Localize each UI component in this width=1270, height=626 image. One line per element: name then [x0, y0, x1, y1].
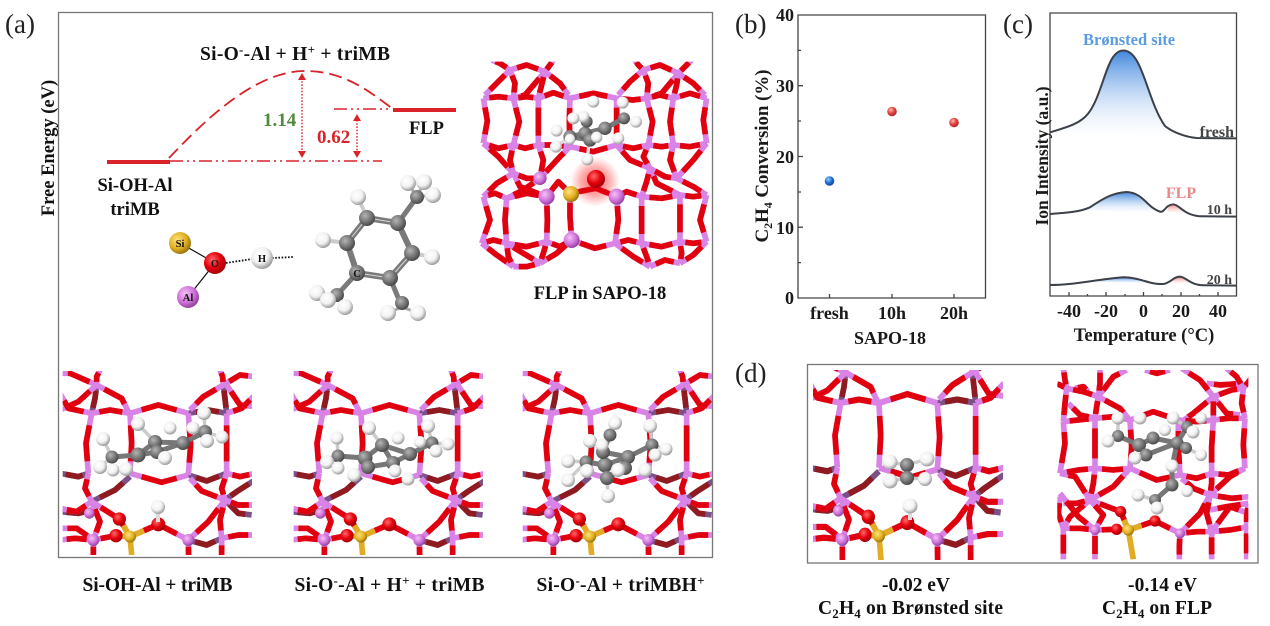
transition state label: + — [308, 42, 315, 57]
x axis title: SAPO-18 — [854, 328, 926, 348]
schematic: Si-O-H-Al site: O — [211, 259, 219, 270]
caption: Si-O--Al + triMBH+: - — [575, 573, 580, 588]
caption: C2H4 on Brønsted site: 2 — [832, 606, 839, 621]
curve 10h — [1050, 192, 1237, 217]
structure: Si-O--Al + H+ + triMB — [294, 371, 483, 555]
FLP structure caption: FLP in SAPO-18 — [534, 284, 666, 304]
panel label (b): (b) — [735, 9, 766, 39]
transition state label: - — [239, 42, 243, 57]
data point 20h — [949, 118, 959, 127]
panel d frame — [808, 364, 1258, 563]
y axis title: C — [752, 229, 773, 242]
area: FLP 20h — [1169, 277, 1192, 284]
initial state label: Si-OH-Al — [97, 176, 173, 196]
FLP level label: FLP — [409, 119, 444, 139]
caption: C2H4 on Brønsted site: H — [839, 598, 854, 619]
x axis numbers: 0 — [1139, 301, 1148, 321]
x axis numbers: -20 — [1094, 301, 1118, 321]
caption: C2H4 on Brønsted site: 4 — [854, 606, 861, 621]
caption: Si-O--Al + H+ + triMB: -Al + H — [338, 575, 402, 596]
y axis title: 2 — [761, 223, 775, 229]
y axis numbers: 40 — [776, 5, 794, 25]
caption: -0.14 eV: -0.14 eV — [1128, 575, 1197, 596]
label Brønsted site: Brønsted site — [1083, 30, 1175, 49]
schematic: Si-O-H-Al site: Si — [176, 239, 184, 250]
caption: Si-O--Al + triMBH+: Si-O — [536, 575, 575, 596]
panel d: C2H4 adsorption structures — [808, 356, 1258, 575]
caption: -0.02 eV: -0.02 eV — [882, 575, 950, 596]
schematic: trimethylbenzene molecule: C — [353, 269, 361, 280]
label 10 h: 10 h — [1207, 203, 1232, 218]
y axis numbers: 0 — [785, 288, 794, 308]
label fresh: fresh — [1200, 124, 1234, 141]
structure: Si-O--Al + triMBH+ — [522, 371, 712, 555]
initial state label: triMB — [110, 200, 160, 220]
caption: C2H4 on Brønsted site: C — [818, 598, 832, 619]
x axis categories: 20h — [940, 303, 968, 323]
x axis numbers: 20 — [1172, 301, 1190, 321]
barrier value 0.62: 0.62 — [317, 127, 350, 148]
plot frame and ticks — [1050, 13, 1236, 296]
panel c: ion intensity curves — [1032, 13, 1237, 346]
schematic: Si-O-H-Al site: H — [258, 254, 266, 265]
y axis title: Conversion (%) — [752, 69, 773, 202]
area: Brønsted 20h — [1097, 277, 1150, 284]
structure: FLP in SAPO-18 — [482, 60, 707, 304]
caption: Si-O--Al + H+ + triMB: Si-O — [294, 575, 333, 596]
barrier value 1.14: 1.14 — [263, 110, 297, 131]
transition state label: -Al + H — [244, 44, 307, 65]
curve 20h — [1050, 277, 1237, 286]
structure: C2H4 on Brønsted site — [813, 370, 1003, 560]
caption: C2H4 on FLP: H — [1123, 598, 1138, 619]
caption: Si-O--Al + H+ + triMB: - — [334, 573, 338, 588]
panel b: C2H4 conversion scatter chart — [752, 5, 986, 348]
caption: Si-OH-Al + triMB: Si-OH-Al + triMB — [82, 575, 232, 596]
x axis title: Temperature (°C) — [1074, 326, 1214, 346]
panel a: free energy diagram and structures — [39, 12, 715, 596]
area: Brønsted 10h — [1083, 192, 1158, 213]
caption: C2H4 on Brønsted site: on Brønsted site — [861, 598, 1003, 619]
x axis categories: 10h — [878, 303, 906, 323]
y axis title: 4 — [761, 202, 775, 208]
transition state label: Si-O — [200, 44, 239, 65]
y axis numbers: 30 — [776, 76, 794, 96]
structure: Si-OH-Al + triMB — [62, 371, 252, 555]
area: Brønsted fresh — [1050, 51, 1197, 138]
panel label (c): (c) — [1003, 9, 1033, 39]
panel label (d): (d) — [735, 358, 766, 388]
label FLP: FLP — [1166, 185, 1196, 202]
caption: Si-O--Al + H+ + triMB: + — [402, 573, 409, 588]
y axis title: Ion Intensity (a.u.) — [1032, 86, 1052, 226]
caption: C2H4 on FLP: 4 — [1138, 606, 1145, 621]
y axis numbers: 10 — [776, 218, 794, 238]
schematic: Si-O-H-Al site — [169, 232, 294, 308]
schematic: trimethylbenzene molecule — [309, 174, 441, 321]
label 20 h: 20 h — [1207, 273, 1232, 288]
x axis numbers — [1057, 301, 1227, 321]
structure: C2H4 on FLP — [1055, 367, 1253, 560]
y axis numbers: 20 — [776, 147, 794, 167]
caption: C2H4 on FLP: C — [1102, 598, 1116, 619]
x axis numbers: -40 — [1057, 301, 1081, 321]
x axis categories — [810, 303, 968, 323]
panel label (a): (a) — [5, 9, 35, 39]
y axis numbers — [776, 5, 794, 308]
caption: Si-O--Al + triMBH+: -Al + triMBH — [580, 575, 697, 596]
caption: Si-O--Al + triMBH+: + — [697, 573, 704, 588]
area: FLP 10h — [1167, 204, 1186, 213]
y axis title: free energy: Free Energy (eV) — [39, 80, 59, 216]
y axis title: H — [752, 208, 773, 223]
caption: C2H4 on FLP: on FLP — [1144, 598, 1212, 619]
x axis categories: fresh — [810, 303, 849, 323]
data point 10h — [887, 107, 897, 116]
schematic: Si-O-H-Al site: Al — [183, 293, 193, 304]
x axis numbers: 40 — [1209, 301, 1227, 321]
spectra — [1050, 51, 1237, 286]
caption: Si-O--Al + H+ + triMB: + triMB — [410, 575, 484, 596]
panel a frame — [58, 12, 712, 558]
curve fresh — [1050, 51, 1237, 138]
energy profile — [107, 71, 456, 162]
data point fresh — [825, 176, 834, 186]
plot frame and ticks — [798, 15, 986, 298]
caption: C2H4 on FLP: 2 — [1116, 606, 1123, 621]
transition state label: + triMB — [315, 44, 390, 65]
